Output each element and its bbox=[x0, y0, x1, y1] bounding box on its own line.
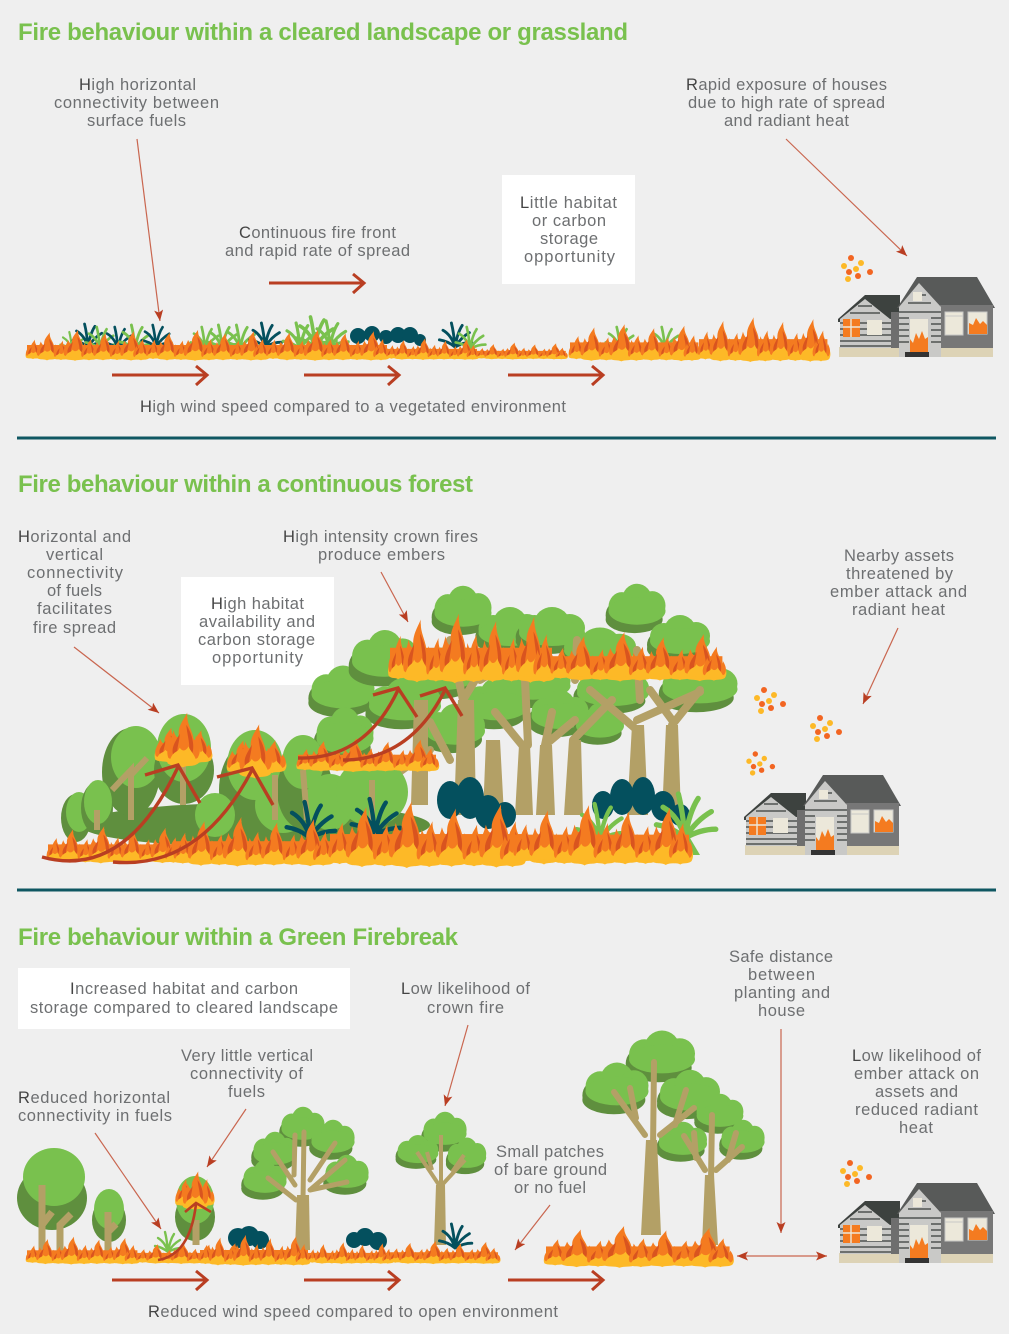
text: continuous fire front bbox=[225, 224, 410, 260]
heading: cleared landscape: Fire behaviour within a cleared landscape or grassland bbox=[18, 19, 628, 46]
text: high horizontal connectivity: connectivity between bbox=[54, 94, 219, 112]
text: rapid exposure of houses: due to high rate of spread bbox=[688, 94, 885, 112]
text: low likelihood of ember attack bbox=[852, 1047, 981, 1137]
text: very little vertical connectivity: connectivity of bbox=[190, 1065, 303, 1083]
text: low likelihood of ember attack: assets and bbox=[875, 1083, 958, 1101]
text: small patches of bare ground bbox=[494, 1143, 607, 1197]
text: horizontal and vertical connectivity: facilitates bbox=[37, 600, 112, 618]
text: horizontal and vertical connectivity bbox=[18, 528, 131, 637]
text: safe distance: planting and bbox=[734, 984, 830, 1002]
text: low likelihood of ember attack: Low likelihood of bbox=[852, 1047, 981, 1065]
callout: high habitat: High habitat bbox=[211, 595, 304, 613]
text: horizontal and vertical connectivity: of fuels bbox=[47, 582, 102, 600]
text: reduced wind speed: Reduced wind speed compared to open environment bbox=[148, 1303, 558, 1321]
text: crown fires bbox=[283, 528, 478, 564]
callout: little habitat: Little habitat bbox=[520, 194, 617, 212]
text: low likelihood of crown fire bbox=[401, 980, 530, 1017]
illustration: house on fire bbox=[838, 277, 995, 357]
text: high wind speed: High wind speed compared to a vegetated environment bbox=[140, 398, 566, 416]
text: small patches of bare ground: of bare ground bbox=[494, 1161, 607, 1179]
panel: green firebreak bbox=[17, 924, 995, 1321]
arrows: wind direction bbox=[112, 1271, 603, 1290]
text: low likelihood of ember attack: heat bbox=[899, 1119, 933, 1137]
text: crown fires: produce embers bbox=[318, 546, 445, 564]
text: very little vertical connectivity: fuels bbox=[228, 1083, 265, 1101]
arrow: to bare ground bbox=[515, 1205, 550, 1250]
illustration: house on fire bbox=[744, 775, 901, 855]
text: rapid exposure of houses: and radiant heat bbox=[724, 112, 849, 130]
illustration: forest on fire bbox=[42, 584, 738, 868]
text: very little vertical connectivity: Very little vertical bbox=[181, 1047, 313, 1065]
callout: high habitat: opportunity bbox=[212, 649, 304, 667]
arrow: to surface fuels bbox=[137, 139, 160, 321]
callout: high habitat bbox=[181, 577, 334, 685]
callout: little habitat bbox=[502, 175, 635, 284]
text: reduced horizontal connectivity: connectivity in fuels bbox=[18, 1107, 172, 1125]
arrow: to assets bbox=[863, 628, 898, 704]
text: nearby assets: Nearby assets bbox=[844, 547, 954, 565]
text: horizontal and vertical connectivity: connectivity bbox=[27, 564, 124, 582]
text: high horizontal connectivity: surface fuels bbox=[87, 112, 186, 130]
illustration: embers bbox=[746, 687, 842, 776]
text: nearby assets bbox=[830, 547, 967, 619]
arrow: to gap bbox=[780, 1029, 782, 1233]
callout: little habitat: or carbon bbox=[532, 212, 606, 230]
arrow: small tree fire rise bbox=[158, 1203, 211, 1260]
text: nearby assets: threatened by bbox=[846, 565, 954, 583]
text: small patches of bare ground: or no fuel bbox=[514, 1179, 586, 1197]
text: safe distance: house bbox=[758, 1002, 805, 1020]
arrows: wind direction bbox=[112, 366, 603, 385]
text: low likelihood of crown fire: Low likelihood of bbox=[401, 980, 530, 998]
arrow: safe distance span bbox=[737, 1255, 827, 1257]
text: safe distance bbox=[729, 948, 833, 1020]
panel: cleared landscape or grassland bbox=[18, 19, 995, 416]
text: horizontal and vertical connectivity: Horizontal and bbox=[18, 528, 131, 546]
arrow: to understorey bbox=[74, 647, 159, 713]
illustration: house bbox=[838, 1183, 995, 1263]
arrow: to ground fire bbox=[95, 1133, 161, 1229]
arrow: to crown bbox=[381, 572, 408, 622]
callout: little habitat: storage bbox=[540, 230, 598, 248]
text: low likelihood of ember attack: ember attack on bbox=[854, 1065, 979, 1083]
arrow: to house bbox=[786, 139, 907, 256]
text: horizontal and vertical connectivity: fire spread bbox=[33, 619, 116, 637]
callout: little habitat: opportunity bbox=[524, 248, 616, 266]
text: safe distance: between bbox=[748, 966, 815, 984]
illustration: firebreak trees and patchy fire bbox=[17, 1030, 765, 1268]
callout: increased habitat: Increased habitat and carbon bbox=[70, 980, 298, 998]
text: continuous fire front: Continuous fire front bbox=[239, 224, 396, 242]
text: rapid exposure of houses bbox=[686, 76, 887, 130]
callout: high habitat: availability and bbox=[199, 613, 315, 631]
heading: continuous forest: Fire behaviour within a continuous forest bbox=[18, 471, 473, 498]
text: low likelihood of crown fire: crown fire bbox=[427, 999, 504, 1017]
callout: high habitat: carbon storage bbox=[198, 631, 315, 649]
heading: green firebreak: Fire behaviour within a Green Firebreak bbox=[18, 924, 459, 951]
text: reduced horizontal connectivity bbox=[18, 1089, 172, 1125]
text: low likelihood of ember attack: reduced radiant bbox=[855, 1101, 978, 1119]
callout: increased habitat: storage compared to cleared landscape bbox=[30, 999, 338, 1017]
text: small patches of bare ground: Small patches bbox=[496, 1143, 604, 1161]
arrow: to small tree bbox=[207, 1109, 246, 1167]
arrow: rate of spread bbox=[269, 274, 364, 293]
arrow: to crown bbox=[445, 1025, 468, 1106]
text: nearby assets: ember attack and bbox=[830, 583, 967, 601]
illustration: embers bbox=[840, 1160, 872, 1187]
text: high horizontal connectivity: High horizontal bbox=[79, 76, 196, 94]
text: horizontal and vertical connectivity: vertical bbox=[46, 546, 103, 564]
text: crown fires: High intensity crown fires bbox=[283, 528, 478, 546]
text: continuous fire front: and rapid rate of spread bbox=[225, 242, 410, 260]
callout: increased habitat bbox=[18, 968, 350, 1029]
text: rapid exposure of houses: Rapid exposure of houses bbox=[686, 76, 887, 94]
illustration: embers bbox=[841, 255, 873, 282]
text: reduced horizontal connectivity: Reduced horizontal bbox=[18, 1089, 170, 1107]
text: high horizontal connectivity bbox=[54, 76, 219, 130]
text: nearby assets: radiant heat bbox=[852, 601, 945, 619]
text: safe distance: Safe distance bbox=[729, 948, 833, 966]
illustration: grass fire line bbox=[26, 317, 830, 362]
panel: continuous forest bbox=[18, 471, 967, 868]
text: very little vertical connectivity bbox=[181, 1047, 313, 1101]
